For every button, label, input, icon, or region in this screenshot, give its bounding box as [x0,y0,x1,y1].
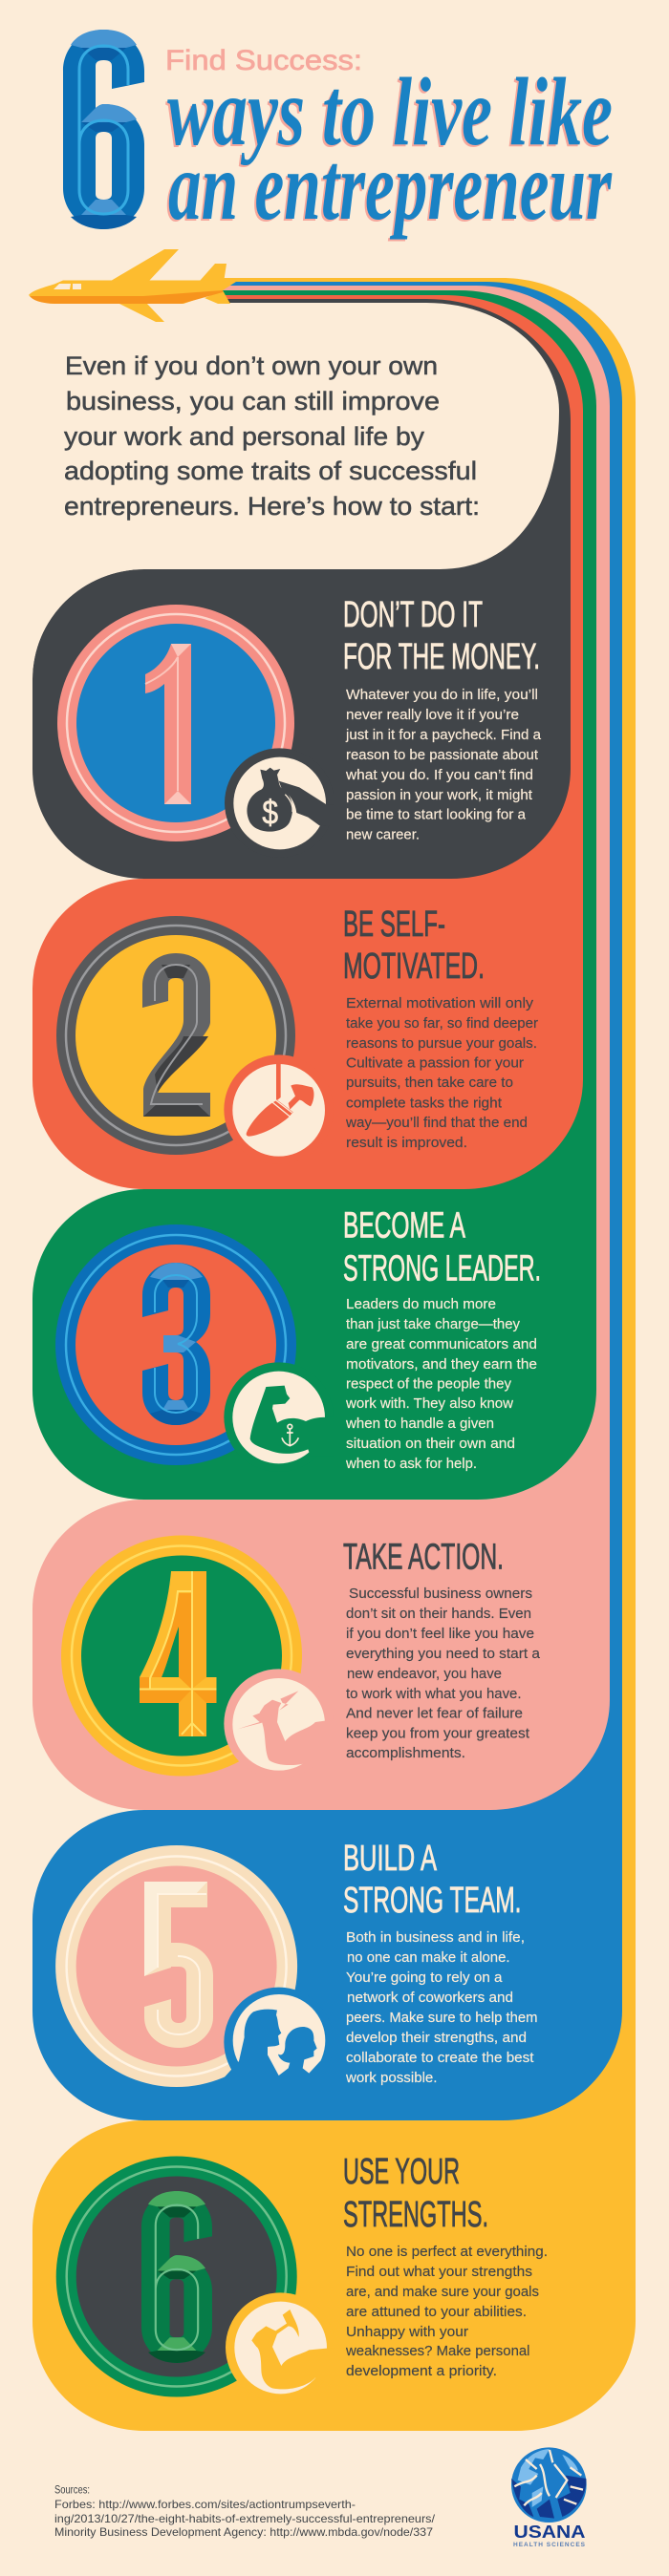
sources: Forbes: http://www.forbes.com/sites/actiontrumpseverth- [54,2498,356,2511]
body text [345,687,542,842]
heading [343,1205,541,1289]
body text: to work with what you have. [346,1686,522,1702]
body text: keep you from your greatest [346,1725,530,1742]
body text: situation on their own and [346,1436,515,1452]
body text: Unhappy with your [346,2324,468,2340]
body text: don’t sit on their hands. Even [346,1606,531,1622]
logo: USANA: HEALTH SCIENCES [513,2542,586,2548]
icon: money bag [225,748,334,858]
body text: than just take charge—they [346,1316,520,1332]
panel background: step 4 pink [32,286,610,1810]
body text: no one can make it alone. [347,1949,510,1966]
panel background: step 5 blue [32,282,622,2120]
body text [346,1586,541,1761]
body text: complete tasks the right [346,1095,503,1112]
icon: globe of figures [511,2447,587,2523]
panel: step 5 content [55,1839,537,2104]
heading [343,2152,488,2235]
body text: reasons to pursue your goals. [346,1035,537,1052]
body text: network of coworkers and [347,1990,513,2006]
body text: if you don’t feel like you have [346,1626,534,1642]
body text: External motivation will only [346,995,534,1011]
heading: STRENGTHS. [343,2195,488,2235]
panel background: step 3 green [32,290,596,1500]
logo: USANA [511,2447,587,2548]
icon: money bag: $ [262,794,278,831]
panel: step 3 content [55,1205,541,1472]
number badge 6 [56,2157,297,2397]
sources [54,2483,436,2539]
body text [345,995,538,1151]
body text: everything you need to start a [346,1646,541,1662]
logo: USANA: USANA [514,2523,585,2542]
body text: result is improved. [346,1135,467,1151]
panel background: step 6 yellow [32,278,636,2431]
body text: work possible. [345,2070,438,2086]
heading: MOTIVATED. [343,947,485,987]
body text: motivators, and they earn the [346,1356,537,1373]
heading: DON’T DO IT [343,595,483,635]
heading: STRONG TEAM. [343,1881,522,1921]
intro text [64,351,480,521]
icon: arm with hammer [226,2292,335,2402]
body text: You’re going to rely on a [346,1969,503,1986]
number badge 5 [55,1845,297,2087]
heading: USE YOUR [343,2152,460,2192]
body text: Leaders do much more [346,1296,496,1312]
body text: weaknesses? Make personal [345,2343,529,2359]
body text: when to ask for help. [345,1456,477,1472]
heading [343,1839,522,1921]
body text: Whatever you do in life, you’ll [346,687,538,703]
body text: are attuned to your abilities. [346,2304,527,2320]
body text: Both in business and in life, [346,1929,525,1946]
rainbow contrail and panel backgrounds [32,278,636,2431]
heading: Find Success: Find Success: [165,45,362,76]
body text: reason to be passionate about [346,747,539,763]
icon: airplane [29,249,236,322]
panel background: step 2 orange [32,295,583,1189]
heading [343,595,540,677]
intro cream background [0,303,559,679]
body text: passion in your work, it might [346,787,533,803]
body text [345,1296,537,1472]
body text: develop their strengths, and [346,2030,527,2046]
body text: Successful business owners [349,1586,532,1602]
sources: Sources: [54,2483,90,2497]
body text: way—you’ll find that the end [345,1115,528,1131]
icon: fist with lightning bolt [224,1669,334,1778]
intro text: Even if you don’t own your own [65,351,438,380]
body text [345,2244,548,2379]
body text: And never let fear of failure [346,1706,523,1721]
heading: BECOME A [343,1205,465,1245]
intro text: entrepreneurs. Here’s how to start: [64,492,480,521]
intro text: adopting some traits of successful [64,457,477,485]
panel: step 6 content [56,2152,548,2402]
body text: take you so far, so find deeper [346,1015,538,1032]
body text: accomplishments. [346,1745,465,1761]
body text: never really love it if you’re [346,707,519,723]
heading: BUILD A [343,1839,437,1879]
panel: step 2 content [56,905,538,1164]
body text: when to handle a given [345,1416,494,1432]
number badge 2 [56,916,295,1155]
title [167,58,613,241]
number badge 4 [61,1536,302,1777]
icon: carrot on a stick [224,1054,334,1164]
heading: FOR THE MONEY. [343,637,540,677]
heading: STRONG LEADER. [343,1249,541,1289]
body text: new career. [346,827,420,842]
body text: pursuits, then take care to [346,1075,513,1091]
body text: new endeavor, you have [347,1666,502,1682]
heading: TAKE ACTION. [343,1538,504,1578]
body text: work with. They also know [345,1395,513,1412]
intro text: business, you can still improve [66,387,440,415]
body text: Cultivate a passion for your [346,1054,524,1072]
body text: development a priority. [346,2363,497,2379]
panel: step 4 content [61,1536,541,1778]
intro text: your work and personal life by [64,422,425,451]
body text: No one is perfect at everything. [346,2244,548,2260]
icon: flexed arm with anchor [224,1362,334,1472]
body text: be time to start looking for a [346,806,527,823]
heading: BE SELF- [343,905,445,945]
body text: what you do. If you can’t find [345,767,533,783]
sources: ing/2013/10/27/the-eight-habits-of-extremely-successful-entrepreneurs/ [54,2512,436,2525]
body text: are great communicators and [346,1336,537,1352]
body text: Find out what your strengths [346,2264,532,2280]
body text: peers. Make sure to help them [346,2010,537,2026]
body text: collaborate to create the best [346,2050,534,2066]
panel: step 1 content [57,595,542,858]
panel background: step 1 dark [32,299,571,879]
body text [345,1929,537,2086]
icon: big blue numeral 6 [63,30,144,229]
body text: respect of the people they [346,1375,511,1393]
heading [343,905,485,987]
body text: are, and make sure your goals [346,2284,539,2300]
number badge 3 [55,1224,296,1465]
body text: just in it for a paycheck. Find a [345,727,542,743]
sources: Minority Business Development Agency: http://www.mbda.gov/node/337 [54,2525,433,2539]
number badge 1 [57,605,294,841]
icon: two silhouettes [224,1988,334,2104]
